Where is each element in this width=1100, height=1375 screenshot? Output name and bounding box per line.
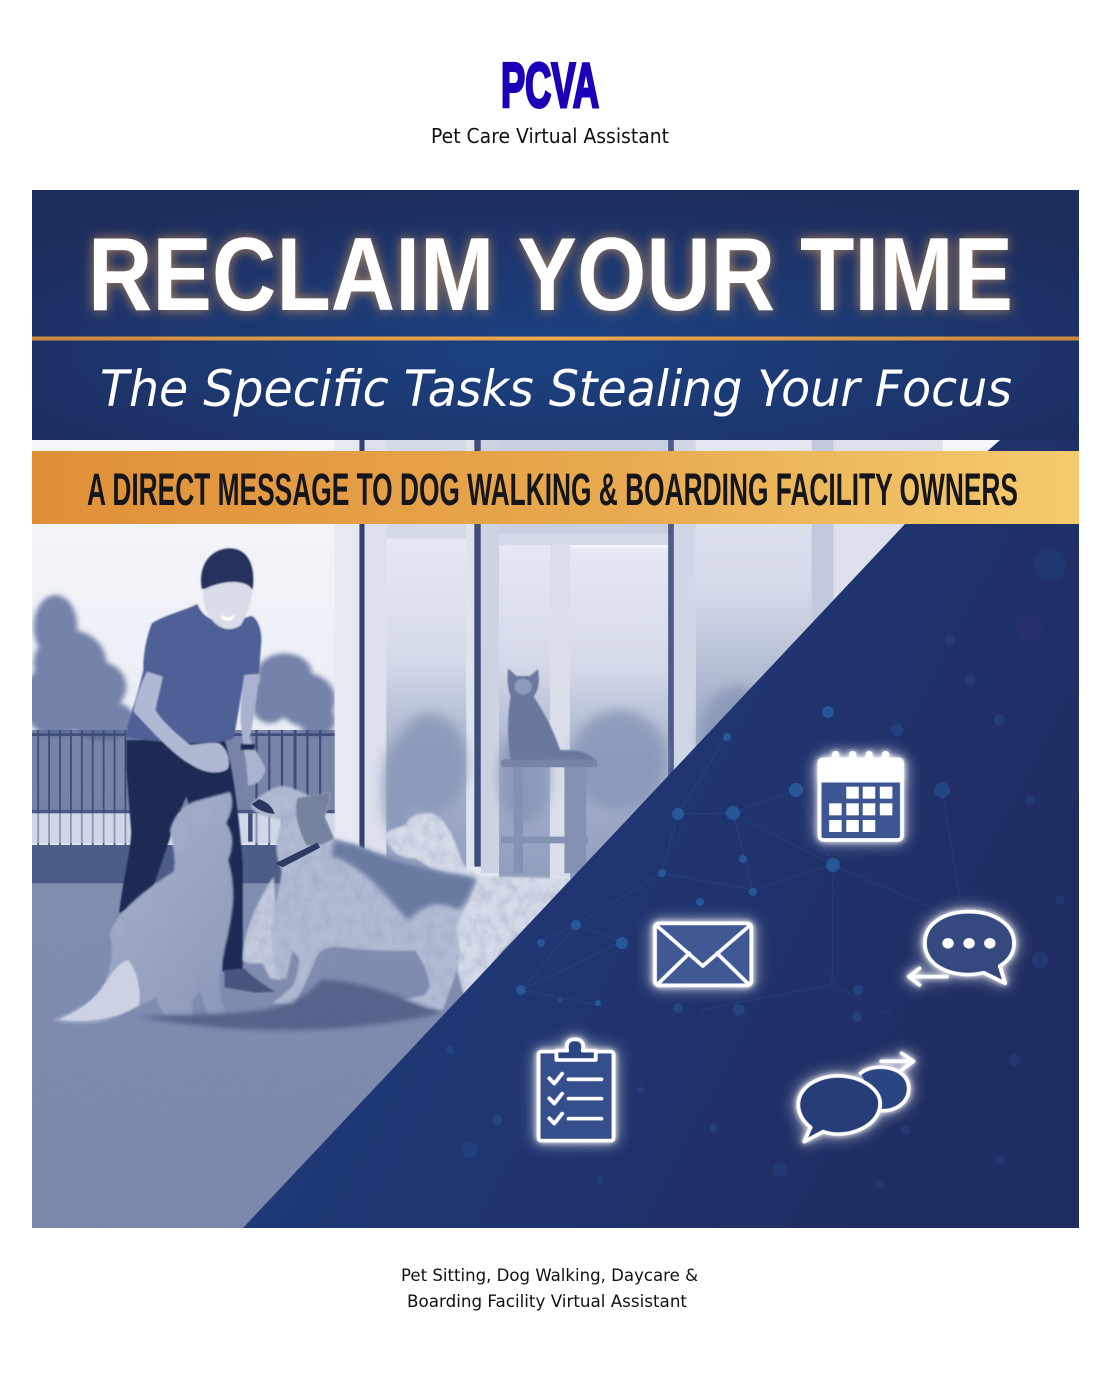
navy diagonal panel [243,440,1079,1228]
icon: clipboard checklist [539,1039,614,1141]
golden retriever [52,792,233,1024]
ground [32,883,567,1228]
small dog behind [243,877,281,980]
poodle [385,813,572,1003]
photo: woman with dogs and cat at facility [23,437,1084,1230]
cat on tree [501,668,597,873]
footer text: Boarding Facility Virtual Assistant [407,1292,687,1312]
poster artwork [23,190,1084,1230]
glass windows [335,437,943,885]
window reflections [383,687,779,837]
husky [251,786,475,1010]
footer text [401,1266,698,1312]
network pattern [446,549,1066,1189]
fence [30,730,335,845]
low wall [32,844,283,884]
footer text: Pet Sitting, Dog Walking, Daycare & [401,1266,698,1286]
icon: calendar [820,751,902,840]
icon: envelope [655,923,751,985]
icons on diagonal panel [539,751,1014,1142]
woman [119,548,275,993]
icon: two speech bubbles with arrow [798,1053,913,1142]
subtitle: The Specific Tasks Stealing Your Focus [100,360,1012,418]
icon: speech bubble with dots and arrow [909,912,1014,985]
shadow on turf [139,980,441,1030]
logo: PCVA: PCVA [501,51,599,121]
trees [23,595,335,740]
tagline: Pet Care Virtual Assistant [431,124,669,148]
gold ribbon [32,451,1079,524]
header banner [32,190,1079,440]
divider line [32,336,1079,340]
